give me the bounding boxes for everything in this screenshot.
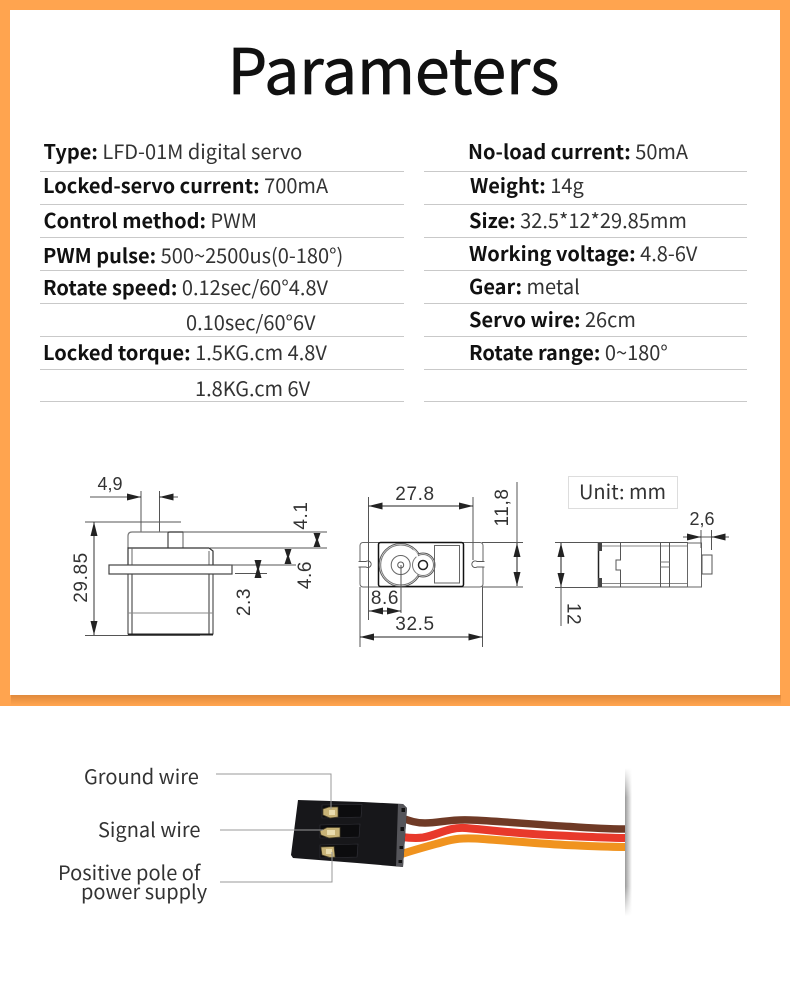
top view dimension drawing: 11,8 bbox=[492, 489, 513, 526]
openings bbox=[320, 804, 362, 858]
unit box: Unit: mm bbox=[579, 476, 666, 505]
white panel bbox=[10, 10, 780, 695]
top view dimension drawing bbox=[358, 482, 523, 647]
parameters table: left column: Locked torque: 1.5KG.cm 4.8V bbox=[43, 337, 327, 366]
parameters table: left column bbox=[40, 136, 404, 402]
servo side outline bbox=[109, 522, 232, 634]
side view dimension drawing: 29.85 bbox=[71, 552, 92, 603]
parameters table: left column: Type: LFD-01M digital servo bbox=[44, 136, 302, 165]
dimension lines bbox=[555, 530, 729, 626]
dimension lines bbox=[360, 482, 523, 647]
parameters table: left column: 0.10sec/60°6V bbox=[186, 307, 316, 336]
servo front outline bbox=[598, 542, 712, 587]
side view dimension drawing bbox=[71, 474, 327, 636]
servo top outline bbox=[358, 542, 484, 587]
parameters table: right column bbox=[424, 136, 747, 402]
shell bbox=[291, 800, 407, 867]
wire labels: Positive pole of bbox=[58, 857, 202, 886]
top view dimension drawing: 32.5 bbox=[395, 614, 435, 635]
parameters table: right column: Weight: 14g bbox=[470, 170, 584, 199]
wire labels: power supply bbox=[81, 876, 208, 905]
parameters table: right column: Servo wire: 26cm bbox=[469, 304, 636, 333]
front view dimension drawing: 12 bbox=[562, 603, 584, 625]
dimension lines bbox=[85, 491, 327, 636]
parameters table: left column: Rotate speed: 0.12sec/60°4.8V bbox=[43, 272, 329, 301]
dimension labels: 4,9 bbox=[97, 474, 123, 494]
parameters table: left column: PWM pulse: 500~2500us(0-180°) bbox=[43, 240, 343, 269]
title: Parameters bbox=[228, 21, 559, 112]
parameters table: right column: Gear: metal bbox=[469, 271, 580, 300]
parameters table: left column: Control method: PWM bbox=[44, 205, 257, 234]
leader lines bbox=[216, 774, 332, 882]
dimension labels: 27.8 bbox=[395, 484, 435, 505]
side view dimension drawing: 2.3 bbox=[234, 588, 255, 616]
panel shadow bbox=[11, 695, 781, 705]
top view dimension drawing: 8.6 bbox=[371, 588, 399, 609]
side view dimension drawing: 4.6 bbox=[295, 561, 316, 589]
front view dimension drawing bbox=[555, 509, 729, 626]
pins bbox=[320, 807, 340, 858]
wire labels: Ground wire bbox=[84, 761, 199, 790]
parameters table: left column: Locked-servo current: 700mA bbox=[43, 170, 329, 199]
parameters table: right column: Rotate range: 0~180° bbox=[469, 337, 668, 366]
side view dimension drawing: 4.1 bbox=[291, 501, 312, 530]
parameters table: left column: 1.8KG.cm 6V bbox=[195, 373, 311, 402]
orange frame bbox=[0, 0, 790, 706]
parameters table: right column: No-load current: 50mA bbox=[468, 136, 689, 165]
parameters table: right column: Working voltage: 4.8-6V bbox=[469, 238, 698, 267]
wire labels bbox=[58, 761, 208, 905]
dimension labels: 2,6 bbox=[689, 509, 715, 529]
wall edge shadow bbox=[625, 768, 632, 916]
wires bbox=[399, 818, 625, 855]
wire labels: Signal wire bbox=[98, 814, 200, 843]
parameters table: right column: Size: 32.5*12*29.85mm bbox=[469, 205, 687, 234]
connector photo bbox=[216, 768, 633, 916]
